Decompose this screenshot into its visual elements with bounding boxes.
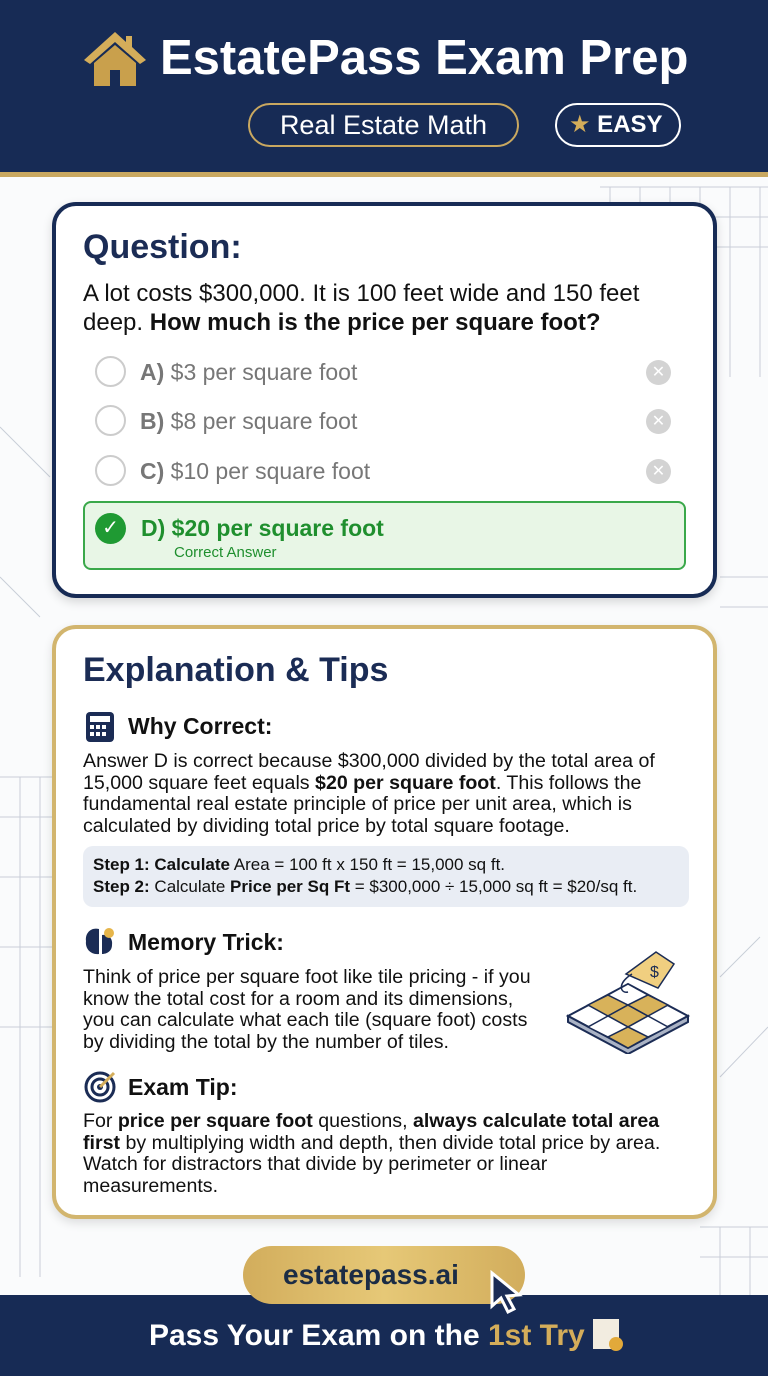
CTA button [243,1246,525,1304]
option B [95,405,671,436]
text: why correct: Answer D is correct because $300,000 divided by the total area of 15,000 square feet equals $20 per square foot. This follows the fundamental real estate principle of price per unit area, which is calculated by dividing total price by total square footage. [83,750,655,836]
option C: ✕ [652,463,665,480]
option B: ✕ [652,413,665,430]
icon: tiles with price tag [566,951,690,1054]
icon: cursor [490,1270,523,1314]
footer [0,1295,768,1376]
option C [95,455,671,486]
steps box [83,846,689,907]
heading: memory trick: Memory Trick: [128,929,284,955]
icon: brain [86,928,114,954]
heading: exam tip: Exam Tip: [128,1074,238,1100]
steps box: Step 2: Calculate Price per Sq Ft = $300,000 ÷ 15,000 sq ft = $20/sq ft. [93,877,637,896]
option A: A) $3 per square foot [140,359,357,385]
title: EstatePass Exam Prep [160,31,688,85]
header [0,0,768,177]
heading: explanation: Explanation & Tips [83,651,388,689]
icon: tiles with price tag: $ [650,964,659,981]
icon: house [84,32,146,86]
option C: C) $10 per square foot [140,458,370,484]
option D correct: Correct Answer [174,544,277,561]
panel: question [52,202,717,598]
question text: A lot costs $300,000. It is 100 feet wide and 150 feet deep. How much is the price per square foot? [83,280,639,336]
option D correct: ✓ [102,517,119,539]
option A: ✕ [652,364,665,381]
text: memory trick: Think of price per square foot like tile pricing - if you know the total cost for a room and its dimensions, you can calculate what each tile (square foot) costs by dividing the total by the number of tiles. [83,966,531,1052]
steps box: Step 1: Calculate Area = 100 ft x 150 ft = 15,000 sq ft. [93,855,505,874]
option D correct: D) $20 per square foot [141,515,384,541]
tag: category: Real Estate Math [280,110,487,140]
CTA button: estatepass.ai [283,1259,459,1290]
option D correct [83,501,686,570]
tag: difficulty [555,103,681,147]
panel: explanation [52,625,717,1219]
heading: why correct: Why Correct: [128,713,272,739]
option A [95,356,671,387]
option B: B) $8 per square foot [140,408,357,434]
icon: target [84,1072,116,1102]
text: exam tip: For price per square foot questions, always calculate total area first by multiplying width and depth, then divide total price by area. Watch for distractors that divide by perimeter or linear measurements. [83,1110,660,1196]
tag: category [248,103,519,147]
footer tagline: Pass Your Exam on the 1st Try [149,1319,585,1352]
icon: calculator [86,712,114,742]
heading: question: Question: [83,228,242,266]
tag: difficulty: ★ EASY [569,111,663,138]
